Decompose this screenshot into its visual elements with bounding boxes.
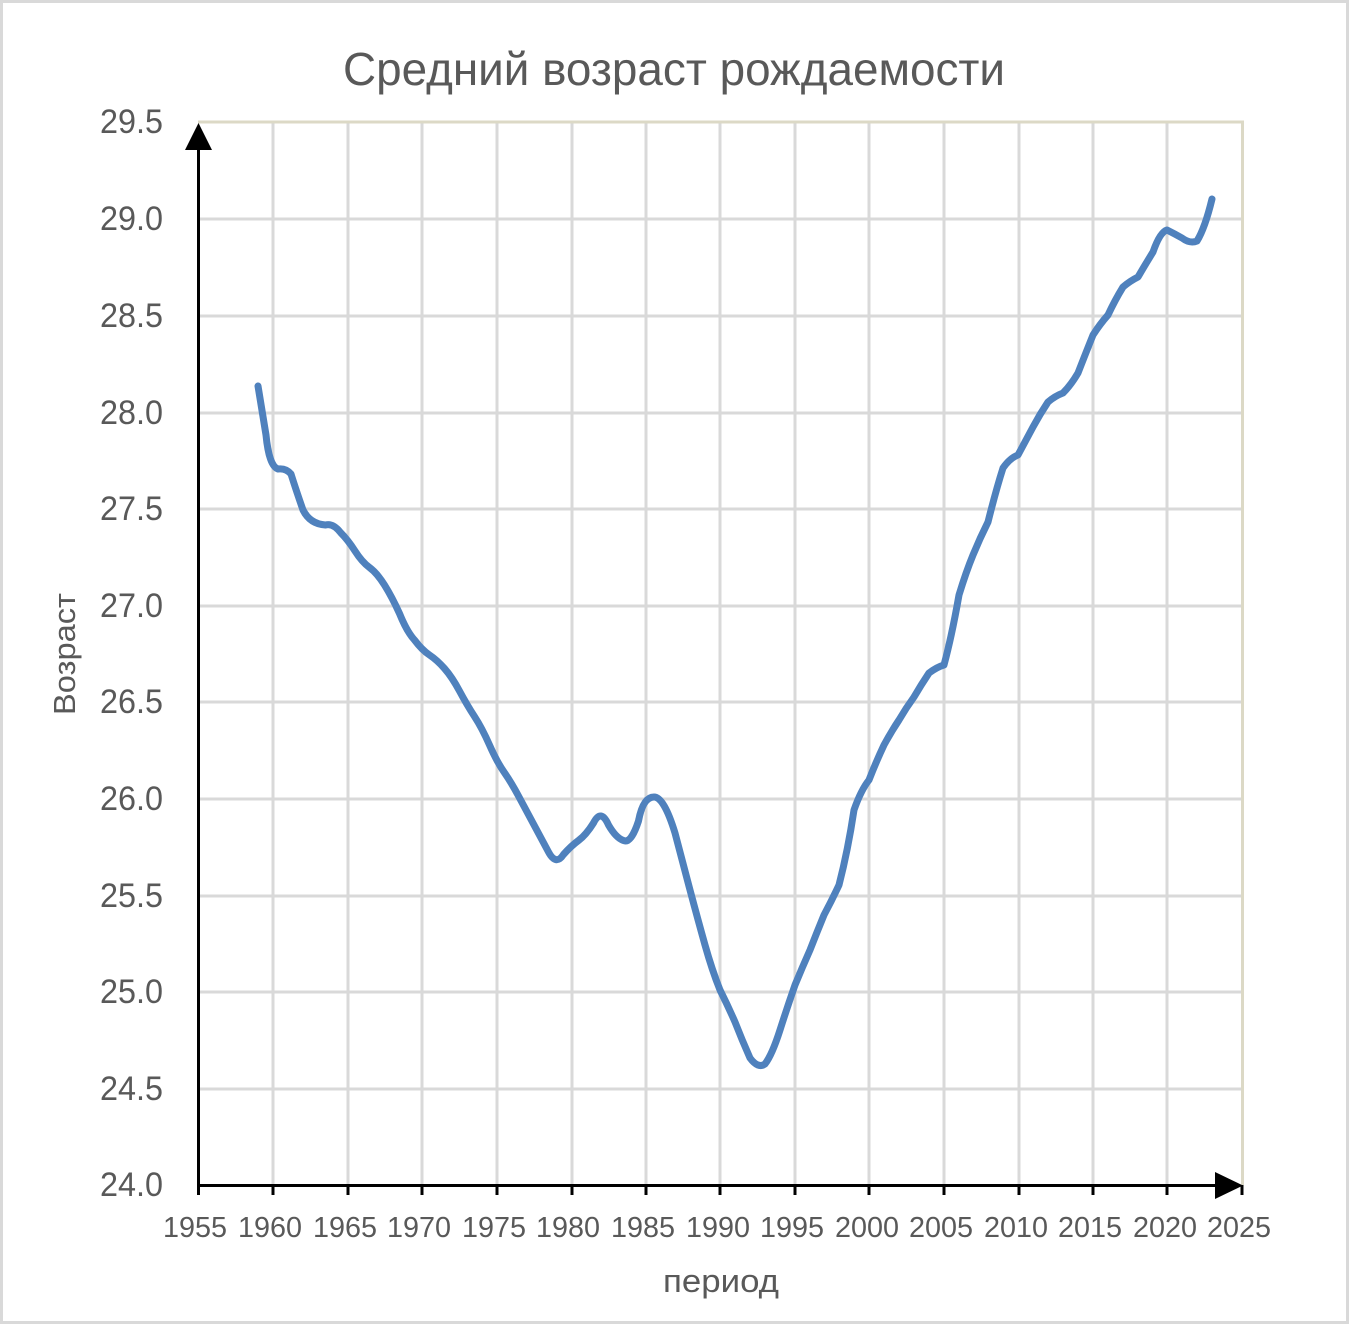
x axis tick labels: 1970 bbox=[387, 1212, 451, 1244]
y axis title: Возраст bbox=[47, 593, 82, 715]
y axis tick labels: 27.0 bbox=[100, 587, 163, 625]
title: Средний возраст рождаемости bbox=[343, 43, 1005, 95]
y axis arrow bbox=[185, 123, 212, 1187]
data line bbox=[258, 199, 1212, 1066]
y axis tick labels: 26.0 bbox=[100, 780, 163, 818]
y axis tick labels: 29.0 bbox=[100, 200, 163, 238]
x axis arrow bbox=[197, 1172, 1243, 1199]
y axis tick labels: 26.5 bbox=[100, 683, 163, 721]
x axis tick labels: 1995 bbox=[760, 1212, 824, 1244]
x axis tick labels: 1965 bbox=[313, 1212, 377, 1244]
y axis tick labels: 28.0 bbox=[100, 394, 163, 432]
y axis tick labels bbox=[100, 103, 163, 1204]
y axis tick labels: 24.0 bbox=[100, 1166, 163, 1204]
x axis tick labels: 1985 bbox=[611, 1212, 675, 1244]
x axis title: период bbox=[663, 1263, 779, 1299]
x axis tick labels: 2000 bbox=[835, 1212, 899, 1244]
x axis tick labels: 1955 bbox=[163, 1212, 227, 1244]
x axis tick labels: 2025 bbox=[1207, 1212, 1271, 1244]
x axis tick labels: 2015 bbox=[1058, 1212, 1122, 1244]
x axis tick labels: 2005 bbox=[909, 1212, 973, 1244]
x axis tick labels: 1980 bbox=[536, 1212, 600, 1244]
y axis tick labels: 24.5 bbox=[100, 1070, 163, 1108]
x axis tick labels: 1975 bbox=[462, 1212, 526, 1244]
x axis tick marks bbox=[198, 1185, 1242, 1195]
x axis tick labels: 1990 bbox=[686, 1212, 750, 1244]
x axis tick labels: 1960 bbox=[238, 1212, 302, 1244]
y axis tick labels: 25.0 bbox=[100, 973, 163, 1011]
y axis tick labels: 28.5 bbox=[100, 297, 163, 335]
y axis tick labels: 29.5 bbox=[100, 103, 163, 141]
y axis tick labels: 27.5 bbox=[100, 490, 163, 528]
y axis tick labels: 25.5 bbox=[100, 877, 163, 915]
x axis tick labels bbox=[163, 1212, 1271, 1244]
x axis tick labels: 2010 bbox=[984, 1212, 1048, 1244]
x axis tick labels: 2020 bbox=[1133, 1212, 1197, 1244]
